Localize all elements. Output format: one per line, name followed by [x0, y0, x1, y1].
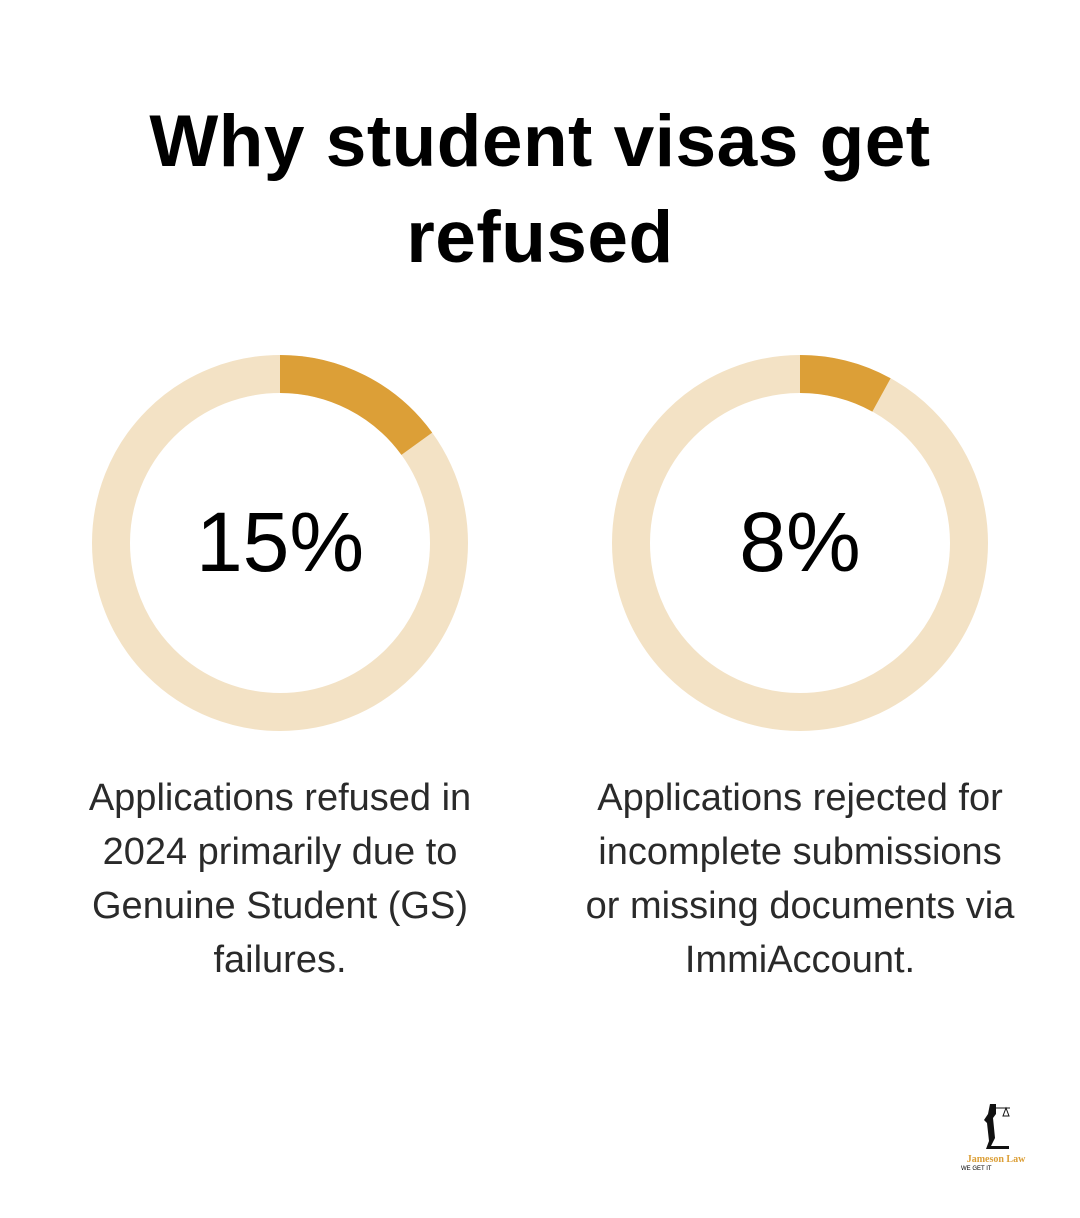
donut chart: 15%: 15%: [196, 495, 364, 589]
donut chart: 8%: [612, 355, 988, 731]
donut chart: 15%: [92, 355, 468, 731]
text: right description: incomplete submissions: [598, 831, 1002, 873]
title: [149, 101, 931, 278]
text: right description: Applications rejected for: [597, 777, 1003, 819]
text: left description: Genuine Student (GS): [92, 885, 468, 927]
logo: Jameson Law: [967, 1154, 1025, 1165]
donut chart: 8%: 8%: [739, 495, 861, 589]
text: left description: failures.: [213, 939, 347, 981]
text: right description: or missing documents via: [586, 885, 1014, 927]
logo: WE GET IT: [961, 1166, 992, 1172]
text: left description: [89, 777, 471, 981]
title: refused: [406, 197, 674, 278]
text: left description: 2024 primarily due to: [103, 831, 457, 873]
text: left description: Applications refused in: [89, 777, 471, 819]
logo: [961, 1104, 1026, 1172]
text: right description: ImmiAccount.: [685, 939, 915, 981]
text: right description: [586, 777, 1014, 981]
title: Why student visas get: [149, 101, 931, 182]
